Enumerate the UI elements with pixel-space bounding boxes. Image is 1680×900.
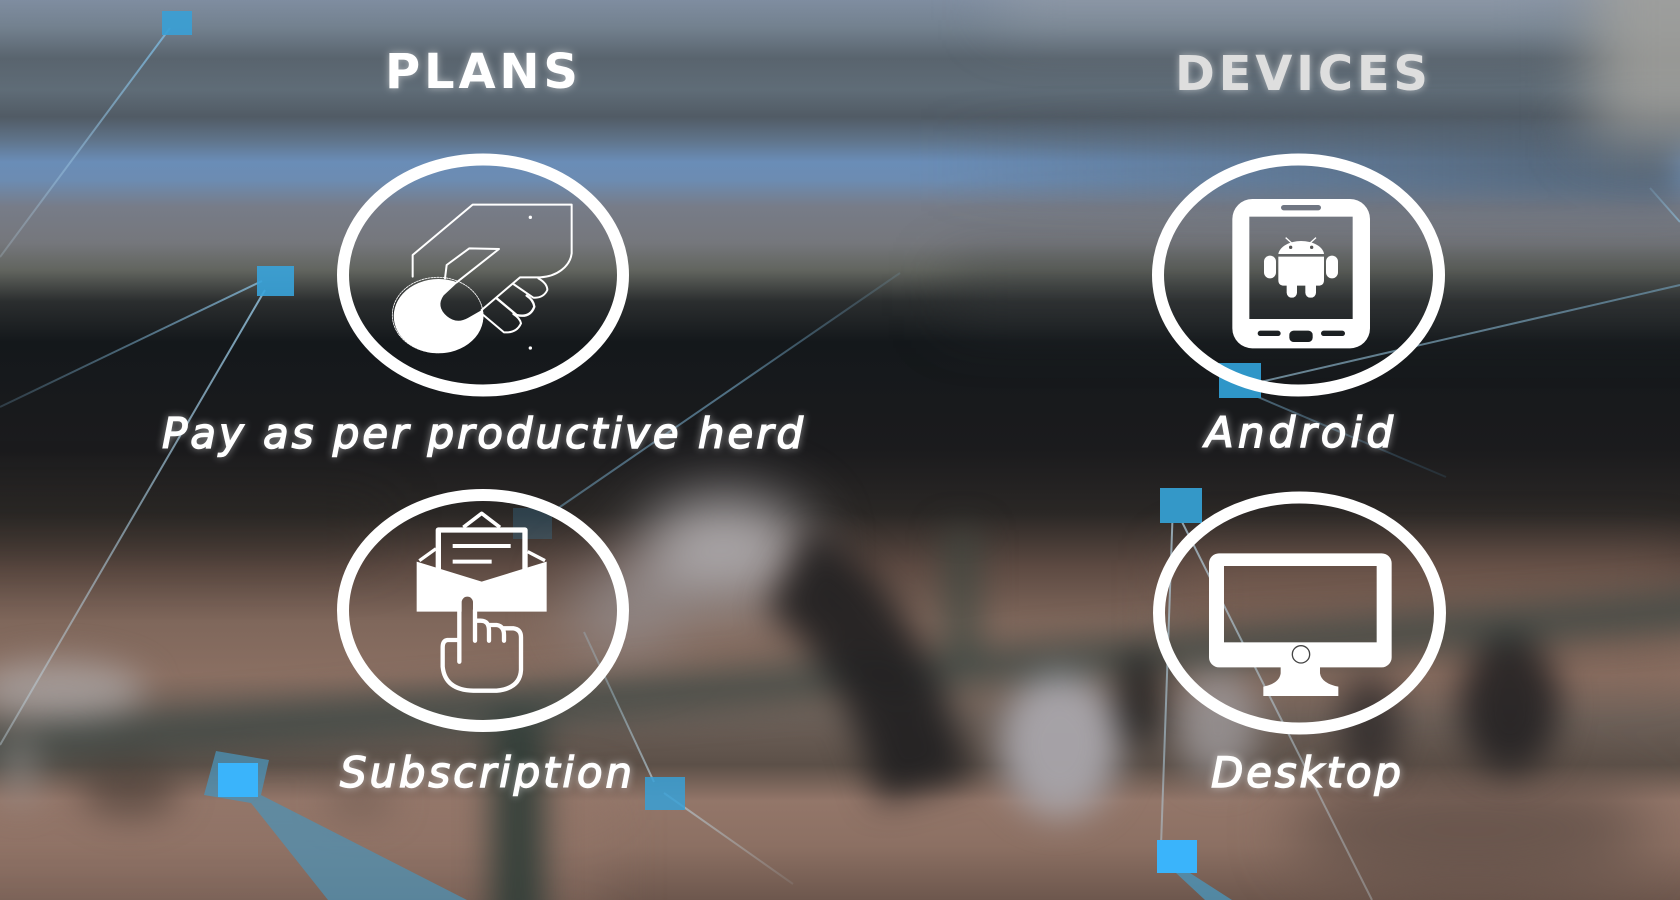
- heading: DEVICES: DEVICES: [1175, 46, 1428, 102]
- icon ring: android: [1158, 160, 1439, 390]
- heading: PLANS: PLANS: [385, 44, 578, 100]
- network nodes: [162, 11, 1261, 900]
- panel: android: [1158, 160, 1439, 457]
- panel: subscription: [340, 495, 632, 797]
- panel: pay as per productive herd: [162, 160, 803, 458]
- label: android: Android: [1202, 408, 1393, 457]
- label: subscription: Subscription: [340, 748, 632, 797]
- icon: android phone: [1232, 199, 1370, 348]
- icon: hand with coin: [392, 205, 572, 353]
- icon: desktop monitor: [1209, 553, 1392, 696]
- label: pay as per productive herd: Pay as per productive herd: [162, 409, 803, 458]
- panel: desktop: [1159, 498, 1440, 797]
- label: desktop: Desktop: [1211, 748, 1401, 797]
- icon ring: hand plan: [343, 160, 623, 390]
- icon ring: subscription: [343, 495, 623, 726]
- icon: envelope with pointing hand: [417, 513, 547, 691]
- icon ring: desktop: [1159, 498, 1440, 728]
